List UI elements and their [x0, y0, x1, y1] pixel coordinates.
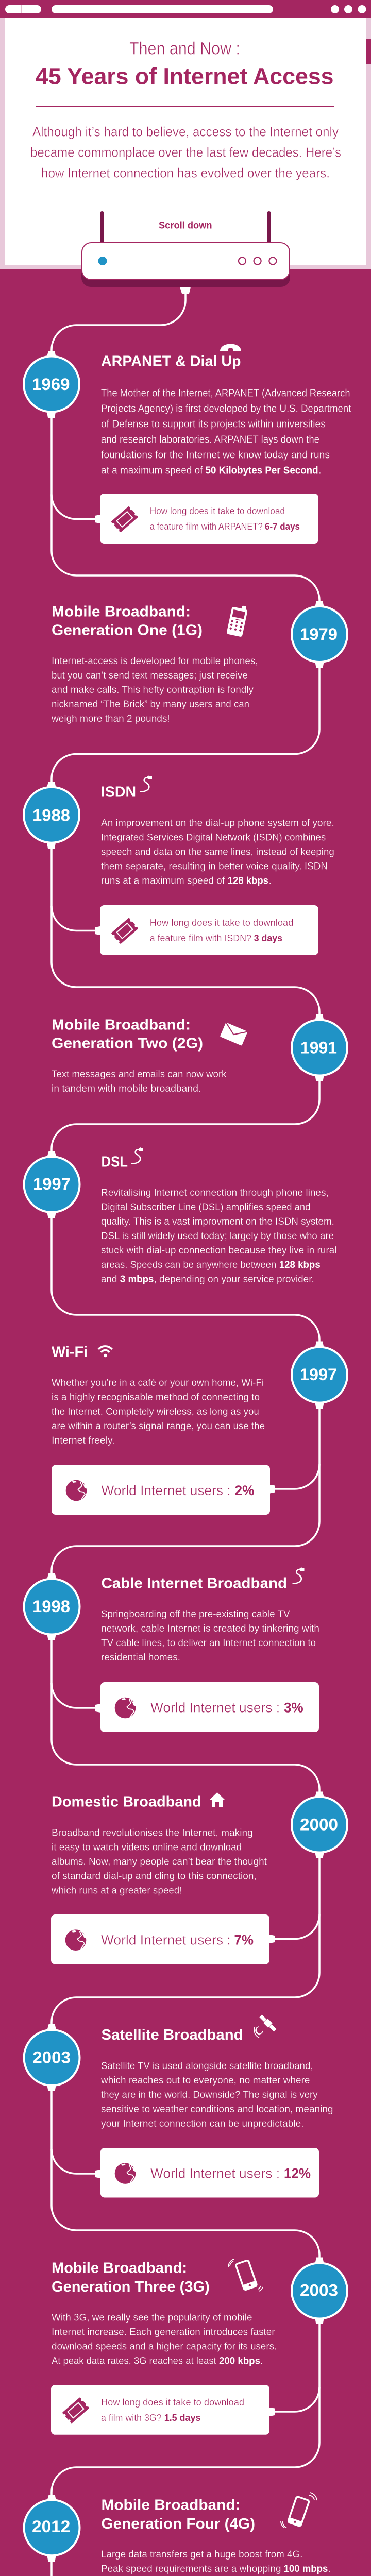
callout: world internet users 3% [95, 1682, 319, 1732]
callout: world internet users 3%: World Internet users : [150, 1700, 280, 1716]
intro text: became commonplace over the last few decades. Here’s [30, 145, 341, 160]
body text: weigh more than 2 pounds! [51, 714, 170, 724]
year badge: 2003 [292, 2258, 347, 2324]
heading: Wi-Fi [52, 1344, 88, 1360]
icon: network cable [140, 775, 152, 792]
callout: film download time: a feature film with ARPANET? [150, 521, 263, 532]
timeline cable [52, 291, 319, 2576]
body text [52, 1378, 265, 1446]
body text: 100 mbps [283, 2564, 328, 2574]
body text: quality. This is a vast improvment on the ISDN system. [101, 1216, 334, 1227]
callout: world internet users 2%: World Internet users : [101, 1483, 231, 1498]
year badge: 1997 [24, 1151, 79, 1218]
title [36, 39, 334, 90]
callout: world internet users 7%: 7% [234, 1932, 254, 1947]
body text: which runs at a greater speed! [51, 1886, 182, 1896]
body text: is a highly recognisable method of connecting to [52, 1392, 260, 1403]
body text [51, 1828, 267, 1896]
body text: and research laboratories. ARPANET lays down the [101, 434, 319, 445]
body text: DSL is still widely used today; largely by those who are [101, 1231, 334, 1242]
body text: The Mother of the Internet, ARPANET (Advanced Research [101, 387, 350, 399]
body text [52, 2312, 277, 2366]
body text: areas. Speeds can be anywhere between [101, 1260, 276, 1270]
body text: At peak data rates, 3G reaches at least [52, 2355, 216, 2366]
panel: mobile broadband 1G [51, 601, 347, 724]
browser window header [0, 0, 371, 269]
body text: are within a router’s signal range, you can use the [52, 1421, 265, 1432]
callout: film download time [95, 494, 318, 544]
body text: , depending on your service provider. [154, 1274, 314, 1285]
body text: sensitive to weather conditions and location, meaning [101, 2104, 333, 2115]
body text: Broadband revolutionises the Internet, making [52, 1828, 253, 1839]
callout: film download time: How long does it take to download [150, 917, 293, 928]
body text: With 3G, we really see the popularity of mobile [52, 2312, 252, 2323]
router with scroll-down label: Scroll down [159, 221, 212, 231]
callout: film download time: 6-7 days [265, 521, 300, 532]
body text: Digital Subscriber Line (DSL) amplifies speed and [101, 1202, 310, 1213]
body text: nicknamed “The Brick” by many users and can [52, 699, 249, 710]
icon: vibrating smartphone [228, 2259, 263, 2291]
body text: of standard dial-up and cling to this connection, [52, 1871, 257, 1882]
body text: 3 mbps [120, 1274, 154, 1285]
intro text: Although it’s hard to believe, access to the Internet only [32, 124, 339, 140]
body text: which reaches out to everyone, no matter where [100, 2075, 310, 2086]
year badge: 2003: 2003 [32, 2048, 71, 2067]
heading: Mobile Broadband: [52, 603, 191, 620]
callout: world internet users 12%: World Internet users : [150, 2165, 280, 2181]
icon: wifi signal [98, 1346, 112, 1357]
heading: Generation One (1G) [52, 622, 203, 639]
callout: world internet users 7% [51, 1914, 275, 1964]
panel: Wi-Fi [52, 1342, 347, 1515]
year badge: 1979: 1979 [300, 625, 338, 643]
year badge: 1991: 1991 [300, 1038, 337, 1057]
body text: Springboarding off the pre-existing cable TV [101, 1609, 290, 1620]
body text: Whether you’re in a café or your own home, Wi-Fi [52, 1378, 264, 1388]
heading: Mobile Broadband: [52, 1016, 191, 1033]
year badge: 1969 [24, 351, 79, 418]
body text: Revitalising Internet connection through phone lines, [101, 1188, 329, 1198]
year badge: 1979 [292, 601, 347, 668]
body text [52, 1069, 227, 1094]
heading: Cable Internet Broadband [101, 1575, 287, 1592]
body text: . [260, 2355, 263, 2366]
panel: mobile broadband 2G [52, 1014, 347, 1094]
title: Then and Now : [129, 39, 240, 59]
callout: film download time: a film with 3G? [101, 2412, 162, 2423]
heading: ARPANET & Dial Up [101, 353, 241, 370]
heading: Mobile Broadband: [52, 2260, 187, 2277]
panel: domestic broadband [51, 1792, 347, 1964]
body text: . [269, 876, 272, 886]
callout: film download time [95, 905, 318, 955]
body text [101, 387, 351, 476]
callout: world internet users 7%: World Internet users : [101, 1932, 231, 1947]
body text: Satellite TV is used alongside satellite broadband, [101, 2061, 313, 2072]
year badge: 2012 [24, 2495, 79, 2562]
body text: 128 kbps [279, 1260, 321, 1270]
body text: Text messages and emails can now work [52, 1069, 227, 1080]
callout: film download time [51, 2385, 275, 2435]
panel: satellite broadband [24, 2014, 333, 2198]
body text: Peak speed requirements are a whopping [101, 2564, 281, 2574]
year badge: 2000 [292, 1792, 347, 1858]
year badge: 2000: 2000 [300, 1816, 338, 1834]
body text: the Internet. Completely wireless, as long as you [52, 1406, 259, 1417]
body text: TV cable lines, to deliver an Internet connection to [101, 1638, 316, 1649]
heading: Generation Three (3G) [52, 2279, 210, 2295]
callout: world internet users 3%: 3% [284, 1700, 303, 1716]
panel: DSL [24, 1147, 336, 1285]
body text: An improvement on the dial-up phone system of yore. [101, 818, 334, 828]
heading: Mobile Broadband: [101, 2497, 240, 2513]
icon: vibrating smartphone [281, 2493, 317, 2528]
body text [101, 1609, 319, 1663]
heading: Satellite Broadband [101, 2027, 243, 2043]
year badge: 2003 [24, 2024, 79, 2091]
year badge: 1997 [292, 1342, 347, 1409]
year badge: 2003: 2003 [300, 2281, 338, 2299]
body text: Integrated Services Digital Network (ISDN) combines [101, 833, 326, 843]
body text: Internet freely. [52, 1435, 115, 1446]
year badge: 1991 [292, 1014, 347, 1081]
callout: world internet users 12%: 12% [284, 2165, 311, 2181]
body text [100, 2061, 333, 2129]
body text [101, 1188, 336, 1285]
body text: . [328, 2564, 331, 2574]
icon: network cable [293, 1567, 304, 1584]
router with scroll-down label [81, 211, 290, 294]
body text [101, 2549, 331, 2574]
icon: envelope [220, 1022, 248, 1046]
body text: residential homes. [101, 1652, 180, 1663]
callout: world internet users 2% [52, 1465, 275, 1515]
heading: Domestic Broadband [52, 1794, 201, 1810]
heading [101, 2497, 255, 2532]
title: 45 Years of Internet Access [36, 63, 334, 90]
body text: 128 kbps [228, 876, 268, 886]
year badge: 1988 [24, 782, 79, 849]
icon: house [210, 1792, 225, 1807]
heading [52, 1016, 203, 1052]
body text: albums. Now, many people can’t bear the thought [52, 1857, 267, 1868]
body text: runs at a maximum speed of [101, 876, 225, 886]
body text: but you can’t send text messages; just receive [52, 670, 248, 681]
callout: film download time: 1.5 days [164, 2412, 200, 2423]
body text: Internet increase. Each generation introduces faster [52, 2327, 275, 2337]
heading: Generation Four (4G) [101, 2516, 255, 2532]
body text: in tandem with mobile broadband. [52, 1083, 201, 1094]
icon: brick mobile phone [226, 603, 248, 637]
icon: satellite [254, 2014, 277, 2038]
body text: them separate, resulting in better voice quality. ISDN [101, 861, 328, 872]
year badge: 1988: 1988 [32, 806, 70, 824]
body text: and [101, 1274, 117, 1285]
year badge: 1998 [24, 1573, 79, 1640]
panel: cable internet broadband [24, 1567, 319, 1732]
callout: film download time: How long does it take to download [101, 2397, 244, 2408]
body text: stuck with dial-up connection because they live in rural [101, 1245, 336, 1256]
body text: Large data transfers get a huge boost from 4G. [101, 2549, 302, 2560]
heading: ISDN [101, 784, 136, 800]
year badge: 1969: 1969 [32, 375, 70, 394]
body text: of Defense to support its projects within universities [101, 418, 326, 430]
body text: your Internet connection can be unpredictable. [101, 2119, 304, 2129]
panel: mobile broadband 4G [24, 2493, 331, 2576]
callout: film download time: How long does it take to download [150, 505, 285, 516]
heading [52, 603, 203, 639]
callout: world internet users 12% [95, 2148, 319, 2198]
body text: speech and data on the same lines, instead of keeping [101, 847, 334, 857]
body text: they are in the world. Downside? The signal is very [101, 2090, 318, 2100]
body text: . [318, 465, 322, 476]
year badge: 1997: 1997 [300, 1365, 337, 1384]
year badge: 2012: 2012 [32, 2517, 70, 2536]
icon: telephone handset [220, 344, 241, 351]
body text: network, cable Internet is created by tinkering with [101, 1623, 319, 1634]
heading: Generation Two (2G) [52, 1036, 203, 1052]
body text: it easy to watch videos online and download [52, 1842, 242, 1853]
body text: 200 kbps [219, 2355, 260, 2366]
body text: at a maximum speed of [101, 465, 203, 476]
year badge: 1998: 1998 [32, 1597, 70, 1616]
panel: ARPANET and dial up [24, 344, 351, 544]
icon: network cable [131, 1147, 143, 1164]
panel: ISDN [24, 775, 334, 955]
body text: Projects Agency) is first developed by the U.S. Department [101, 403, 351, 414]
body text [51, 656, 258, 724]
panel: mobile broadband 3G [51, 2258, 347, 2435]
callout: film download time: a feature film with ISDN? [150, 933, 251, 943]
body text: foundations for the Internet we know today and runs [101, 449, 330, 461]
body text: 50 Kilobytes Per Second [206, 465, 318, 476]
callout: film download time: 3 days [254, 933, 282, 943]
body text: Internet-access is developed for mobile phones, [52, 656, 258, 667]
body text: and make calls. This hefty contraption is fondly [52, 685, 254, 696]
body text [101, 818, 334, 886]
heading [52, 2260, 210, 2295]
body text: download speeds and a higher capacity for its users. [52, 2341, 277, 2352]
intro text: how Internet connection has evolved over the years. [41, 165, 330, 181]
intro text [30, 124, 341, 181]
year badge: 1997: 1997 [33, 1175, 71, 1193]
heading: DSL [101, 1154, 128, 1170]
callout: world internet users 2%: 2% [235, 1483, 255, 1498]
